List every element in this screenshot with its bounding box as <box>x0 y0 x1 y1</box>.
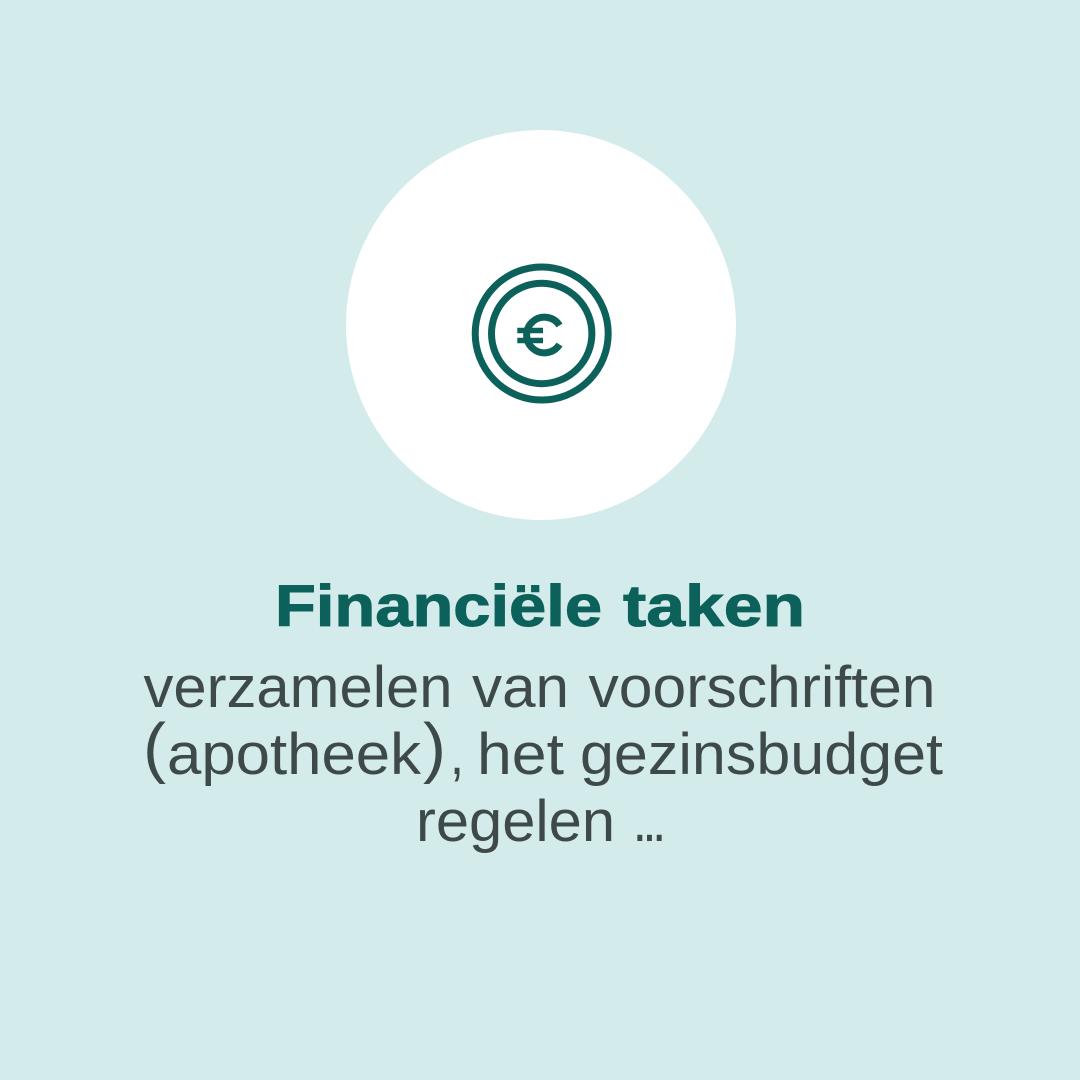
heading: Financiële <box>275 574 602 639</box>
description text: ) <box>423 710 446 785</box>
description text: regelen <box>416 789 615 854</box>
description text: ... <box>635 803 664 850</box>
description text: het <box>477 722 564 787</box>
icon: euro coin <box>475 267 608 400</box>
description text: , <box>450 722 464 787</box>
description text: van <box>472 655 569 720</box>
description text <box>143 655 943 854</box>
description text: ( <box>143 710 166 785</box>
heading: taken <box>623 574 805 639</box>
description text: apotheek <box>167 722 422 787</box>
description text: gezinsbudget <box>580 722 943 787</box>
description text: verzamelen <box>144 655 452 720</box>
white circle with euro coin icon <box>346 130 736 520</box>
heading <box>275 574 805 639</box>
description text: voorschriften <box>588 655 936 720</box>
